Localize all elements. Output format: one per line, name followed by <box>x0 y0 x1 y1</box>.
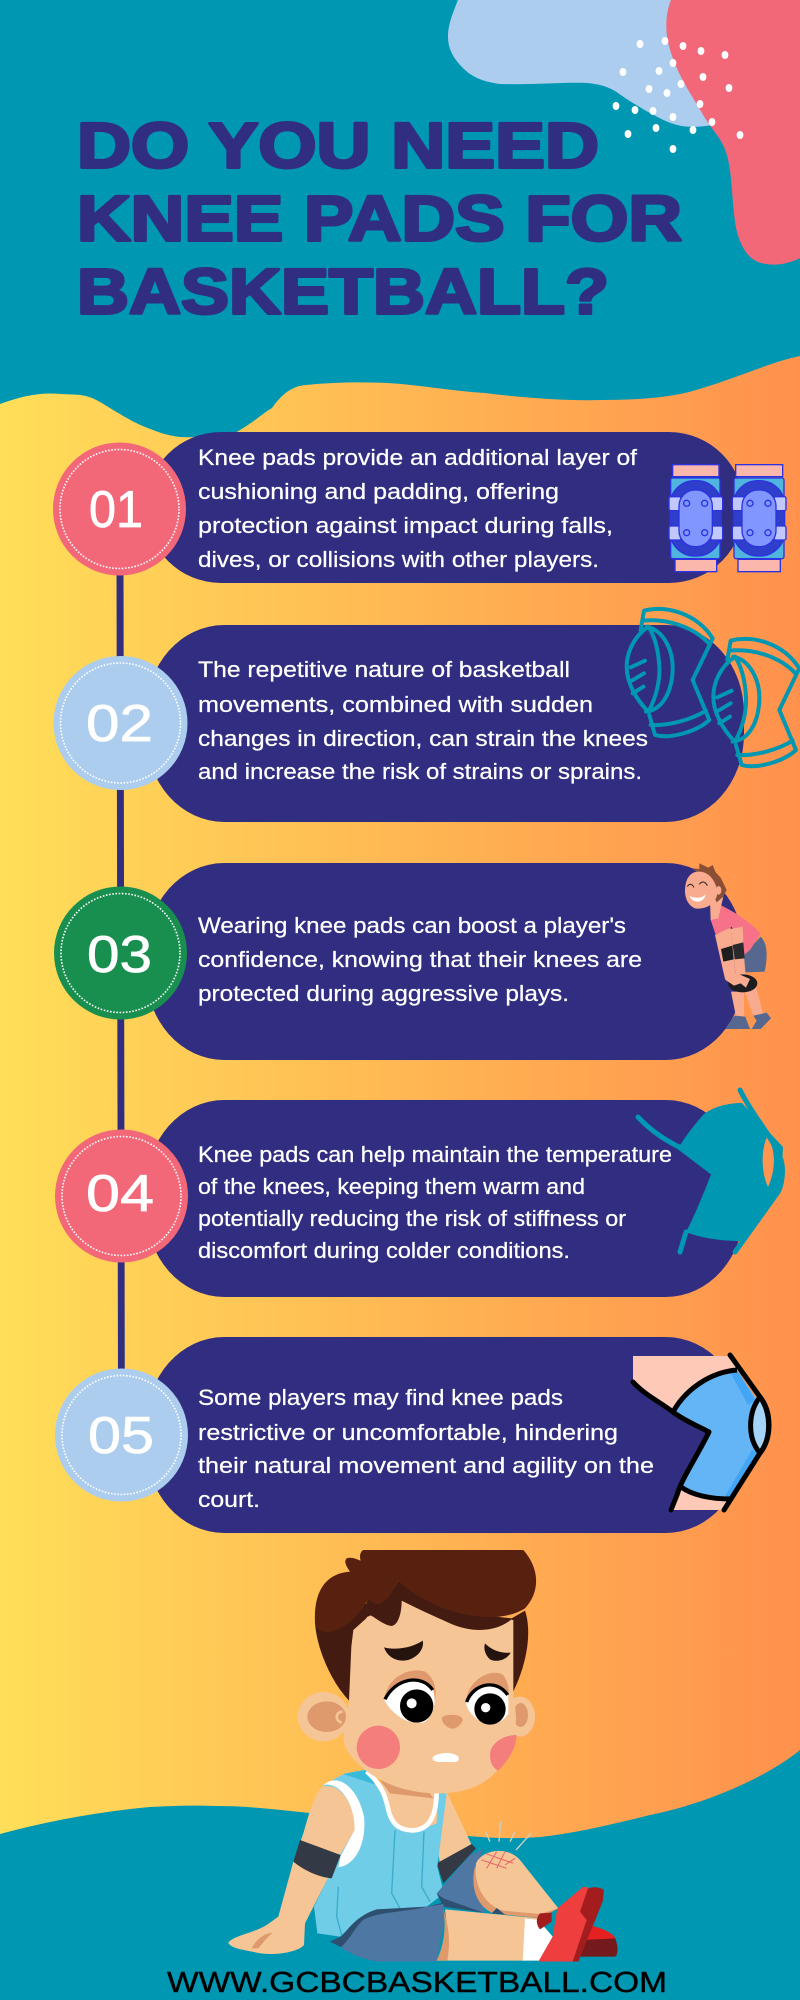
panel 1: cushioning: cushioning and padding, offering <box>198 479 559 504</box>
panel 4: temperature: potentially reducing the risk of stiffness or <box>198 1206 626 1231</box>
panel 4: temperature: discomfort during colder conditions. <box>198 1238 570 1263</box>
timeline connector line <box>116 560 125 1390</box>
panel 5: restrictive: restrictive or uncomfortable, hindering <box>198 1420 618 1445</box>
panel 3: confidence: protected during aggressive plays. <box>198 981 569 1006</box>
decoration: white dots <box>613 37 743 153</box>
website footer: WWW.GCBCBASKETBALL.COM <box>167 1967 667 1999</box>
badge 05: 05 <box>88 1407 154 1465</box>
badge 03: 03 <box>87 926 152 984</box>
panel 1: cushioning: dives, or collisions with other players. <box>198 547 599 572</box>
panel 5: restrictive <box>146 1337 744 1533</box>
badge 03 <box>54 886 187 1020</box>
panel 2: repetitive strain: The repetitive nature of basketball <box>198 657 570 682</box>
title: DO YOU NEED <box>77 110 599 182</box>
badge 02 <box>54 656 188 790</box>
panel 4: temperature <box>146 1100 744 1297</box>
icon: knee with blue sleeve <box>633 1355 769 1510</box>
badge 04 <box>55 1130 188 1262</box>
panel 1: cushioning: protection against impact during falls, <box>198 513 613 538</box>
badge 05 <box>55 1368 188 1502</box>
title <box>77 110 682 328</box>
icon: solid teal knee sleeve <box>638 1090 783 1252</box>
panel 5: restrictive: their natural movement and agility on the <box>198 1453 654 1478</box>
decoration: coral blob <box>666 0 800 265</box>
badge 02: 02 <box>86 695 153 753</box>
panel 2: repetitive strain: movements, combined with sudden <box>198 692 593 717</box>
badge 01 <box>53 442 186 576</box>
icon: pair of blue knee pads <box>669 465 786 572</box>
background: gradient band with wavy edges <box>0 356 800 1838</box>
panel 2: repetitive strain <box>146 625 744 822</box>
panel 4: temperature: of the knees, keeping them warm and <box>198 1174 585 1199</box>
panel 5: restrictive: Some players may find knee pads <box>198 1385 563 1410</box>
panel 3: confidence: confidence, knowing that their knees are <box>198 947 642 972</box>
boy: body and clothes <box>228 1769 617 1962</box>
panel 2: repetitive strain: and increase the risk of strains or sprains. <box>198 759 642 784</box>
icon: teal outline knee sleeves <box>627 609 799 766</box>
panel 3: confidence <box>146 863 744 1060</box>
decoration: light blue blob <box>448 0 725 127</box>
title: BASKETBALL? <box>77 256 609 328</box>
boy: head <box>298 1550 536 1793</box>
title: KNEE PADS FOR <box>77 182 682 254</box>
panel 5: restrictive: court. <box>198 1487 260 1512</box>
panel 2: repetitive strain: changes in direction, can strain the knees <box>198 726 648 751</box>
panel 1: cushioning: Knee pads provide an additional layer of <box>198 445 638 470</box>
panel 4: temperature: Knee pads can help maintain the temperature <box>198 1142 672 1167</box>
panel 1: cushioning <box>146 432 744 583</box>
badge 01: 01 <box>89 481 143 539</box>
illustration: sad boy with scraped knee <box>228 1550 617 1962</box>
panel 3: confidence: Wearing knee pads can boost a player's <box>198 913 626 938</box>
badge 04: 04 <box>86 1165 154 1223</box>
icon: smiling player wearing knee pads <box>685 863 771 1029</box>
